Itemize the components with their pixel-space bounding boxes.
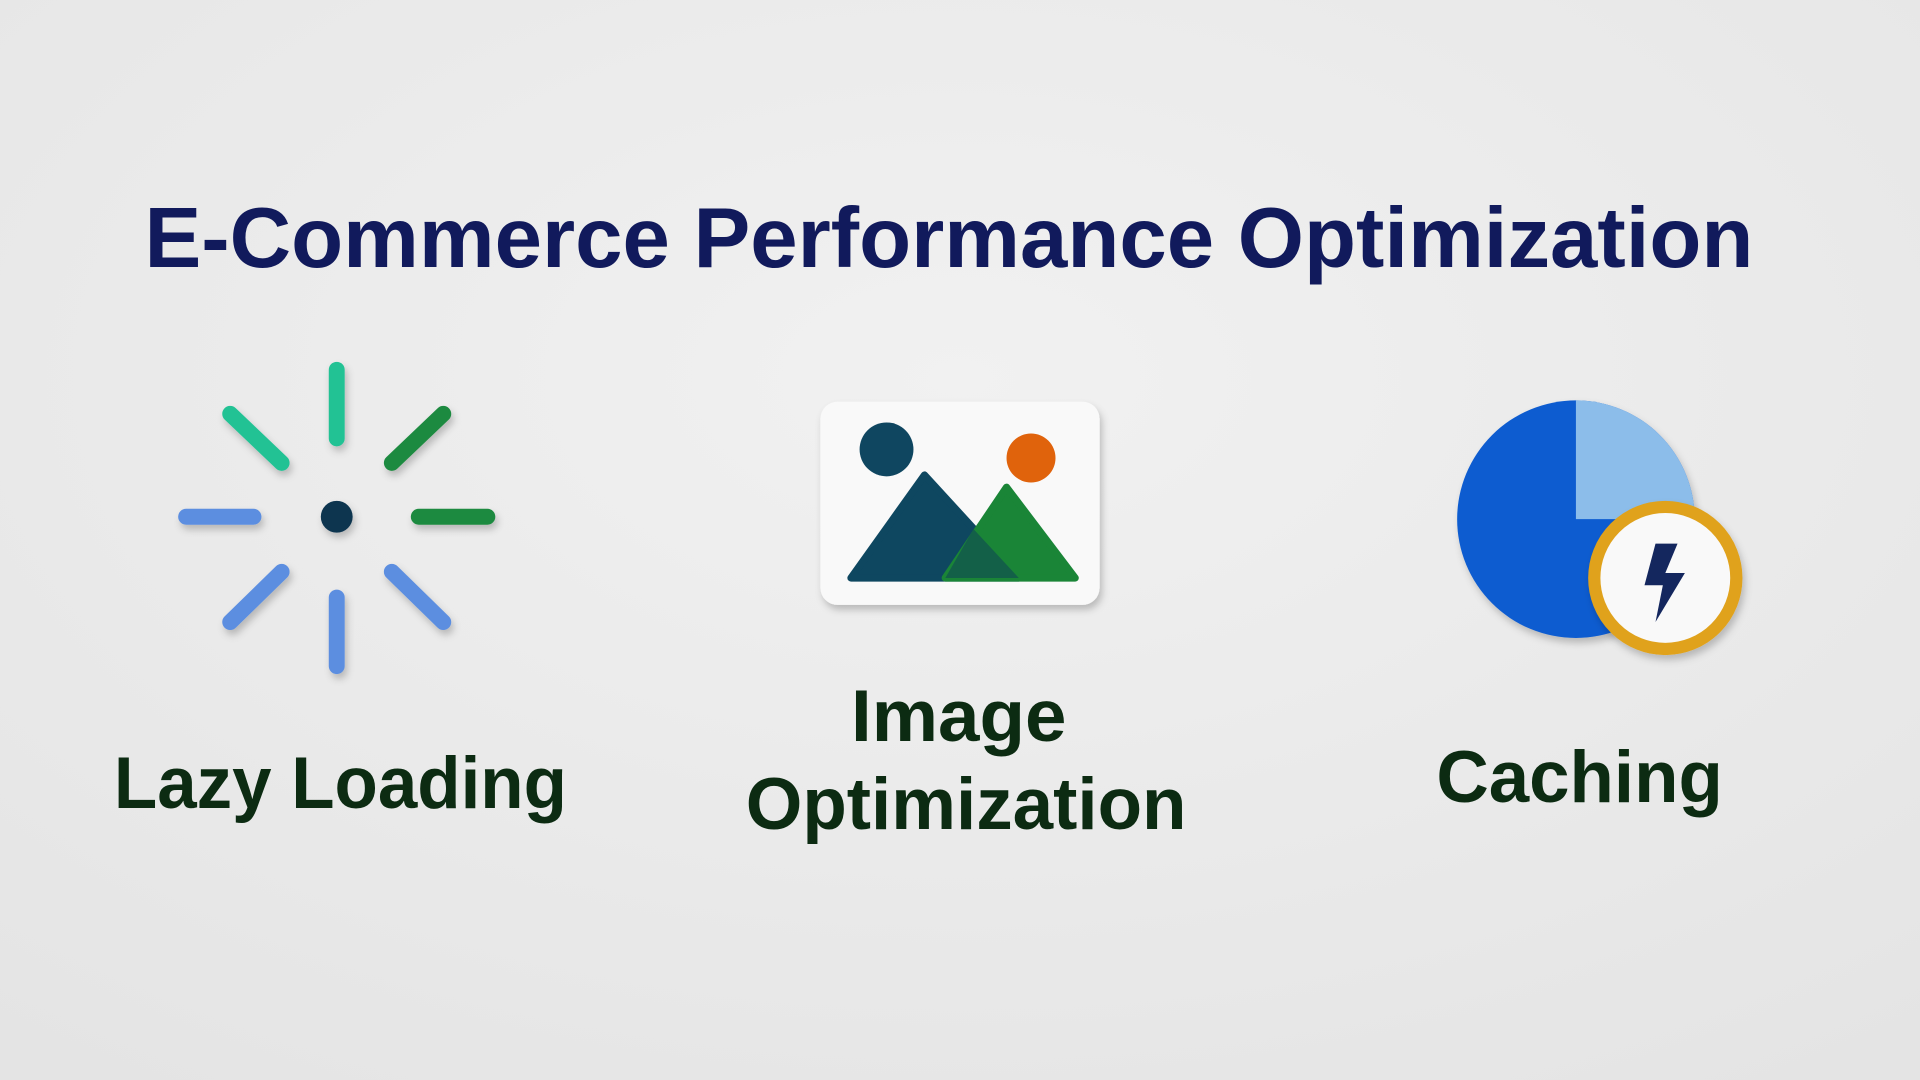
icon: image card xyxy=(820,402,1100,605)
label: Caching: Caching xyxy=(1436,735,1723,818)
label: Image Optimization: Image xyxy=(851,674,1067,757)
title: E-Commerce Performance Optimization xyxy=(144,190,1753,286)
icon: caching pie with lightning badge xyxy=(1457,400,1736,649)
icon: lazy loading spinner xyxy=(186,370,487,666)
label: Image Optimization xyxy=(746,674,1187,845)
label: Image Optimization: Optimization xyxy=(746,762,1187,845)
label: Lazy Loading: Lazy Loading xyxy=(114,741,567,824)
